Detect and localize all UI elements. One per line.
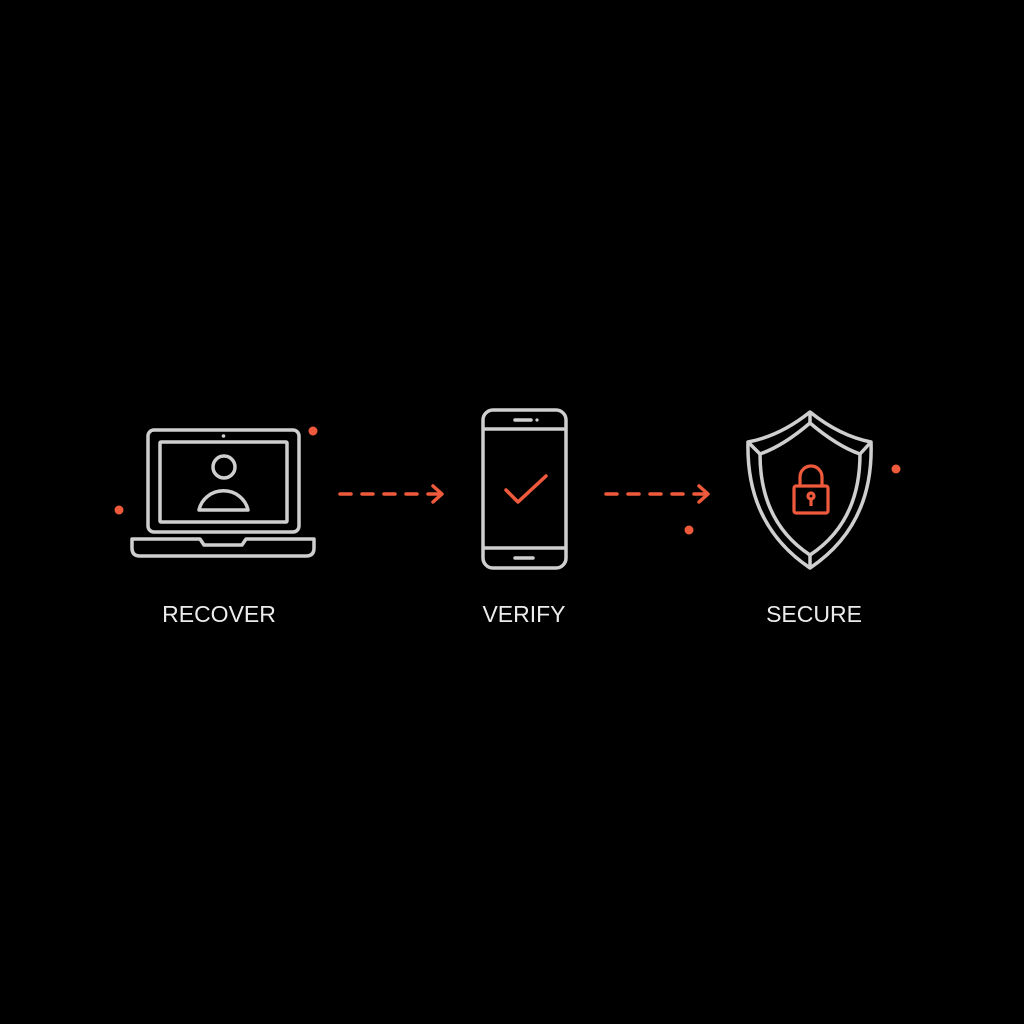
dot: decorative orange <box>308 426 318 436</box>
icon: shield with lock <box>748 412 871 568</box>
label: VERIFY: VERIFY <box>482 601 566 627</box>
label: SECURE: SECURE <box>766 601 862 627</box>
icon: lock <box>794 466 828 513</box>
dot: decorative orange <box>114 506 124 514</box>
icon: phone <box>483 410 566 568</box>
label: RECOVER: RECOVER <box>162 601 276 627</box>
arrow: recover to verify <box>340 486 442 502</box>
icon: laptop <box>132 430 314 556</box>
dot: decorative orange <box>684 526 694 534</box>
icon: checkmark <box>506 476 546 502</box>
dot: decorative orange <box>892 464 900 474</box>
arrow: verify to secure <box>606 486 708 502</box>
